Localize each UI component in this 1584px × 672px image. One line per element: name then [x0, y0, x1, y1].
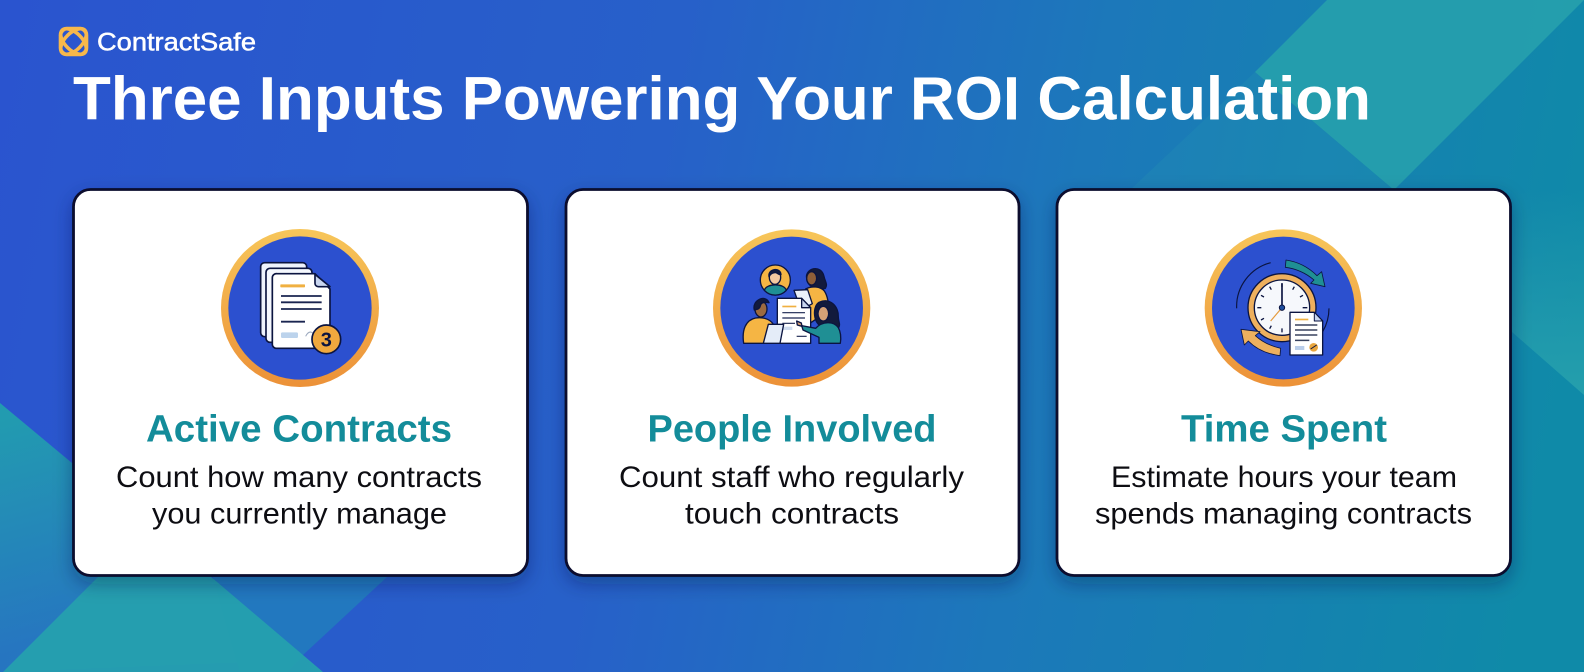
description: spends managing contracts	[1095, 498, 1472, 530]
card background	[1057, 190, 1510, 576]
description	[1095, 461, 1472, 530]
icon: logo mark	[56, 24, 91, 59]
description	[619, 461, 964, 530]
card background	[566, 190, 1019, 576]
logo wordmark: ContractSafe	[97, 28, 256, 56]
description: Count how many contracts	[116, 461, 482, 494]
card background	[74, 190, 528, 576]
description	[116, 461, 482, 530]
description: you currently manage	[152, 498, 447, 530]
icon: stack of documents with badge 3	[221, 229, 379, 387]
title: Three Inputs Powering Your ROI Calculation	[73, 64, 1371, 132]
panel: time spent	[1057, 190, 1510, 576]
icon: team around a document	[713, 229, 870, 387]
description: touch contracts	[685, 498, 899, 530]
icon: stack of documents with badge 3: 3	[321, 329, 332, 351]
panel: people involved	[566, 190, 1019, 576]
heading: People Involved	[648, 408, 936, 450]
panel: active contracts	[74, 190, 528, 576]
logo: ContractSafe	[56, 24, 256, 59]
description: Count staff who regularly	[619, 461, 964, 494]
description: Estimate hours your team	[1111, 461, 1457, 494]
icon: clock with arrows and document	[1205, 229, 1362, 387]
heading: Time Spent	[1181, 408, 1387, 450]
heading: Active Contracts	[146, 408, 452, 450]
